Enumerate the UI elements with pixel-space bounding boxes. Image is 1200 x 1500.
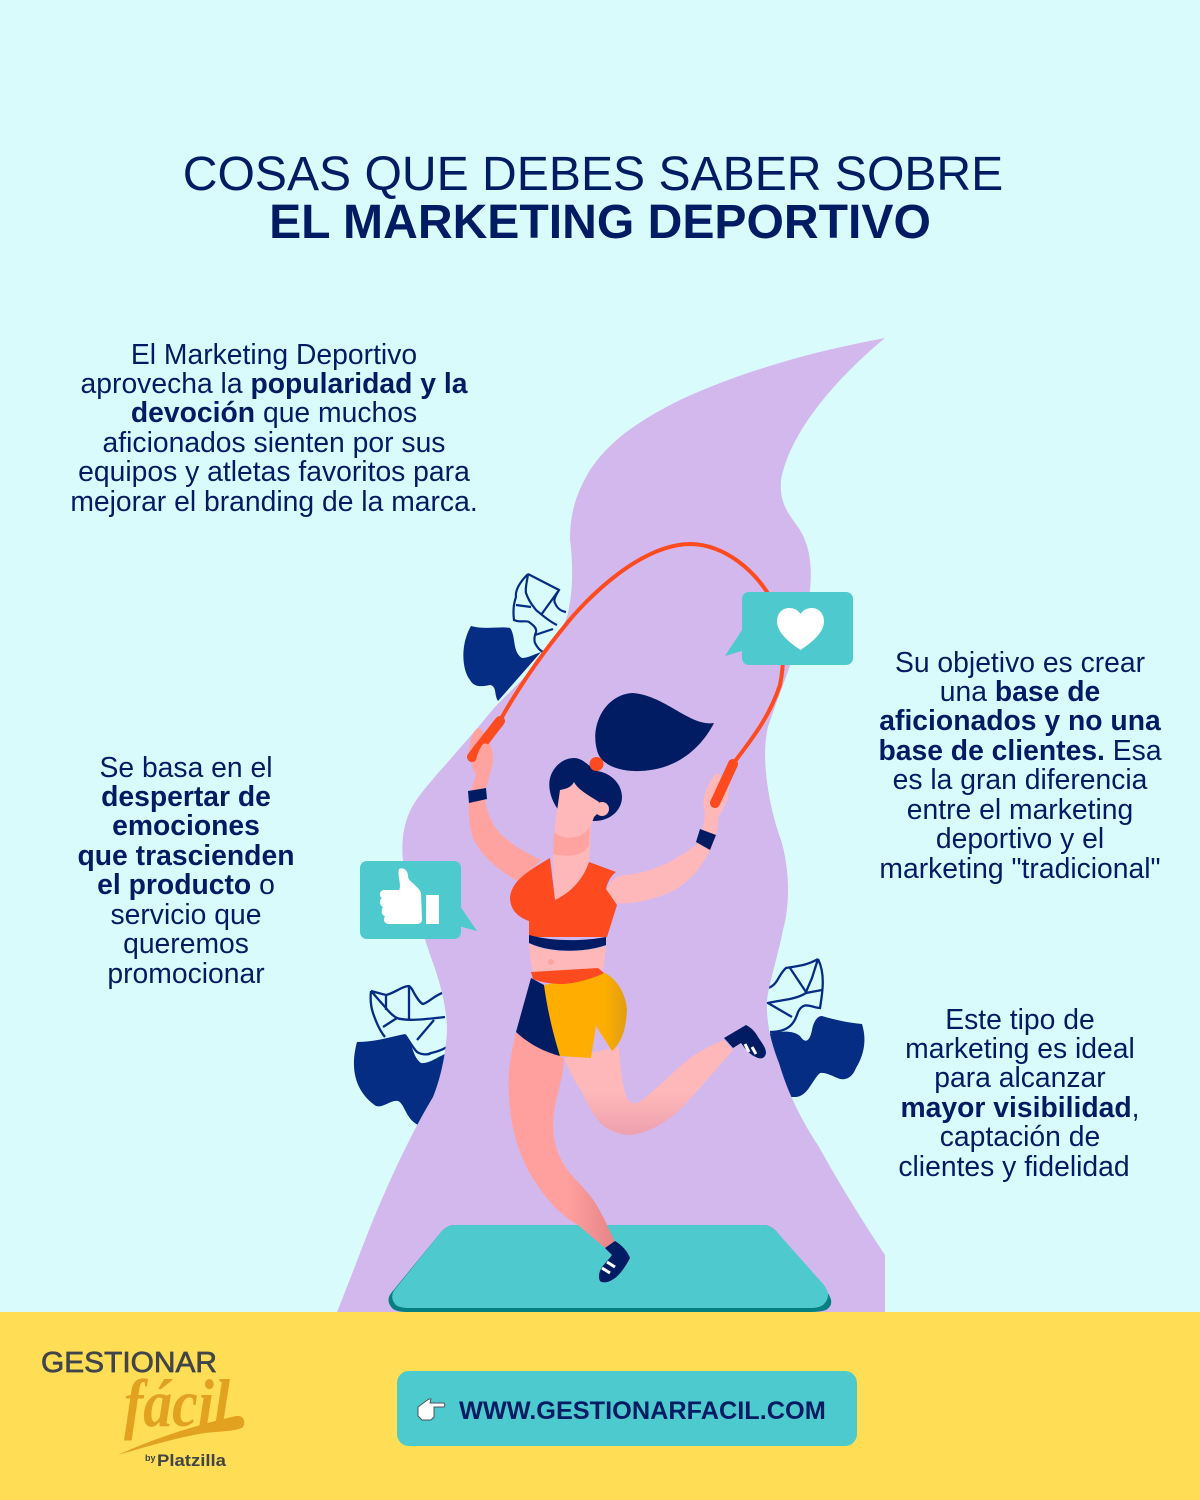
speech bubble: heart	[725, 592, 853, 665]
back arm	[469, 728, 541, 882]
back leg	[508, 1032, 615, 1248]
front arm	[607, 810, 719, 903]
leaf: top left	[463, 574, 566, 701]
text block: emotions: que trascienden	[77, 839, 294, 871]
text block: emotions: servicio que	[110, 898, 262, 930]
exercise mat	[388, 1225, 831, 1312]
text block: objective: Su objetivo es crear	[895, 646, 1145, 678]
icon: pointing hand	[418, 1398, 446, 1420]
face	[555, 782, 599, 837]
text block: objective: es la gran diferencia	[893, 763, 1147, 795]
woman	[468, 693, 766, 1282]
text block: objective: una base de	[940, 675, 1100, 707]
text block: visibility: Este tipo de	[945, 1002, 1095, 1034]
wristband left	[468, 788, 487, 803]
text block: emotions	[77, 750, 294, 989]
shorts navy	[516, 978, 560, 1056]
text block: emotions: el producto o	[97, 868, 275, 900]
text block: visibility: para alcanzar	[934, 1061, 1106, 1093]
text block: definition: devoción que muchos	[131, 396, 417, 428]
title	[183, 147, 1003, 249]
purple blob background	[337, 338, 885, 1312]
neck	[553, 820, 591, 900]
crop top	[510, 858, 617, 937]
belly	[529, 944, 606, 973]
front leg	[564, 1040, 733, 1135]
text block: visibility: captación de	[940, 1120, 1100, 1152]
leaf: bottom left	[354, 986, 450, 1125]
logo: Gestionar Fácil by Platzilla: Platzilla	[157, 1451, 227, 1470]
text block: definition	[70, 338, 478, 517]
neck shadow	[553, 826, 590, 856]
jump rope	[502, 544, 783, 760]
logo: Gestionar Fácil by Platzilla: GESTIONAR	[41, 1347, 217, 1379]
speech bubble: thumbs up	[360, 861, 477, 939]
text block: visibility: marketing es ideal	[905, 1032, 1135, 1064]
rope handle left	[472, 721, 500, 757]
logo: Gestionar Fácil by Platzilla: by	[145, 1453, 156, 1463]
footer band	[0, 1312, 1200, 1500]
title: COSAS QUE DEBES SABER SOBRE	[183, 147, 1003, 201]
logo: Gestionar Fácil by Platzilla	[41, 1347, 244, 1470]
shoe raised	[724, 1025, 766, 1058]
top band	[529, 935, 606, 951]
text block: definition: equipos y atletas favoritos para	[78, 455, 470, 487]
shoe lower	[599, 1241, 630, 1282]
text block: objective: aficionados y no una	[879, 704, 1161, 736]
text block: visibility: clientes y fidelidad	[898, 1150, 1130, 1182]
text block: emotions: despertar de	[101, 780, 271, 812]
left hand grip	[475, 743, 492, 776]
text block: objective: marketing "tradicional"	[879, 852, 1161, 884]
text block: emotions: emociones	[112, 809, 260, 841]
text block: objective: deportivo y el	[936, 822, 1104, 854]
ear	[595, 802, 609, 816]
waistband	[531, 968, 604, 984]
text block: emotions: Se basa en el	[99, 750, 273, 782]
text block: emotions: promocionar	[107, 957, 265, 989]
text block: definition: aprovecha la popularidad y la	[81, 367, 467, 399]
shorts yellow	[544, 973, 627, 1058]
text block: objective: base de clientes. Esa	[878, 734, 1162, 766]
rope handle right	[715, 764, 733, 803]
text block: emotions: queremos	[123, 927, 249, 959]
wristband right	[696, 829, 716, 850]
hair tie	[590, 757, 604, 771]
text block: definition: mejorar el branding de la marca.	[70, 485, 478, 517]
text block: visibility: mayor visibilidad,	[900, 1091, 1140, 1123]
text block: objective	[878, 646, 1162, 884]
url text: WWW.GESTIONARFACIL.COM	[459, 1397, 826, 1425]
text block: definition: El Marketing Deportivo	[131, 338, 417, 370]
ponytail	[595, 693, 714, 771]
logo: Gestionar Fácil by Platzilla: fácil	[124, 1365, 230, 1441]
text block: definition: aficionados sienten por sus	[103, 426, 445, 458]
leaf: bottom right	[760, 959, 864, 1097]
text block: objective: entre el marketing	[907, 793, 1133, 825]
text block: visibility	[898, 1002, 1140, 1182]
navel	[548, 959, 554, 965]
website button	[397, 1371, 857, 1446]
hand right	[704, 773, 729, 815]
title: EL MARKETING DEPORTIVO	[269, 195, 931, 249]
hair	[549, 758, 622, 821]
